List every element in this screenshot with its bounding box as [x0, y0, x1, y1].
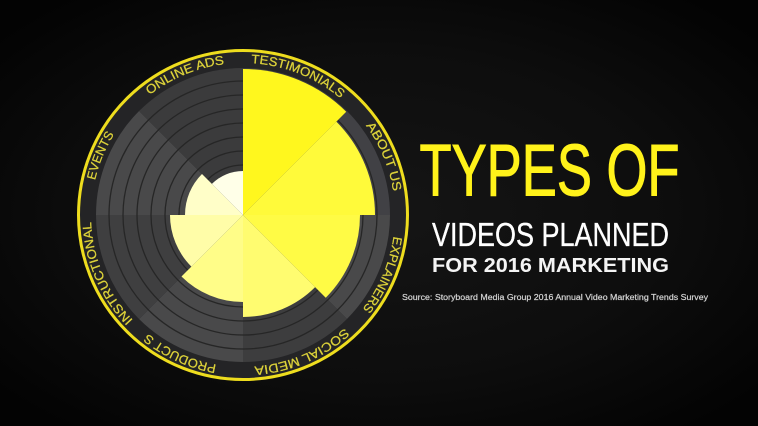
label: testimonials: TESTIMONIALS [252, 54, 344, 98]
label: about us: ABOUT US [366, 124, 402, 190]
category labels [82, 54, 402, 375]
label: explainers: EXPLAINERS [364, 237, 402, 313]
sector: online ads [212, 162, 265, 215]
label: instructional: INSTRUCTIONAL [82, 222, 132, 326]
sector: events [185, 174, 243, 215]
gray background sectors [66, 38, 420, 392]
concentric grid rings [109, 81, 377, 349]
label: online ads: ONLINE ADS [146, 56, 224, 94]
label: social media: SOCIAL MEDIA [254, 329, 349, 375]
label: products: PRODUCT S [144, 334, 216, 374]
data sectors [155, 69, 402, 338]
label: events: EVENTS [86, 131, 113, 180]
subtitle: videos planned: VIDEOS PLANNED [432, 217, 669, 254]
sector: social media [192, 215, 315, 338]
sector: explainers [243, 215, 360, 298]
subtitle: for 2016 marketing: FOR 2016 MARKETING [432, 255, 669, 277]
radial chart [77, 49, 708, 381]
sector: instructional [155, 178, 243, 267]
source note: Source: Storyboard Media Group 2016 Annual Video Marketing Trends Survey [402, 293, 708, 302]
sector: testimonials [243, 69, 346, 215]
outer ring [78, 50, 408, 380]
sector: about us [243, 122, 402, 281]
sector: products [181, 215, 243, 302]
